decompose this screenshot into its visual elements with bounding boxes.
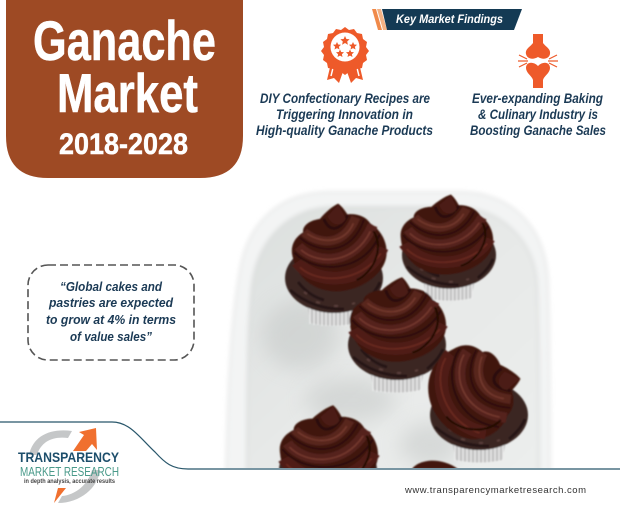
logo: Transparency Market Research: TRANSPARENCY	[18, 449, 120, 465]
cupcake: lower right	[427, 344, 529, 463]
cupcake: bottom edge	[412, 461, 458, 469]
banner: Key Market Findings: Key Market Findings	[396, 12, 503, 26]
text: finding one: DIY Confectionary Recipes are	[260, 91, 430, 106]
banner: Key Market Findings	[372, 9, 522, 30]
callout: quote	[28, 265, 194, 360]
text: finding one: High-quality Ganache Products	[256, 123, 433, 138]
title: Ganache Market: 2018-2028	[59, 128, 188, 161]
cupcake: top left	[285, 199, 391, 326]
photo: cupcakes on white plate	[225, 190, 552, 468]
icon: medal rosette	[321, 27, 369, 83]
title: Ganache Market: Market	[57, 62, 198, 124]
text: finding two	[470, 91, 606, 138]
cupcake: centre	[348, 277, 446, 393]
logo: Transparency Market Research	[18, 428, 120, 503]
panel: title block	[6, 0, 243, 178]
callout: quote: to grow at 4% in terms	[46, 312, 176, 327]
website url: www.transparencymarketresearch.com	[404, 485, 586, 496]
callout: quote: pastries are expected	[48, 295, 174, 310]
footer curve line	[0, 422, 620, 469]
logo: Transparency Market Research: MARKET RESEARCH	[20, 465, 119, 479]
callout: quote: “Global cakes and	[60, 279, 163, 294]
logo: Transparency Market Research: in depth analysis, accurate results	[24, 479, 116, 485]
text: finding one	[256, 91, 433, 138]
callout: quote: of value sales”	[70, 329, 152, 344]
cupcake: bottom left	[278, 404, 380, 468]
title: Ganache Market: Ganache	[33, 9, 216, 72]
icon: knee joint	[518, 34, 558, 88]
cupcake: top right	[401, 195, 496, 301]
title: Ganache Market	[33, 9, 216, 161]
text: finding one: Triggering Innovation in	[276, 107, 413, 122]
text: finding two: Ever-expanding Baking	[472, 91, 604, 106]
text: finding two: & Culinary Industry is	[478, 107, 598, 122]
plate	[226, 192, 550, 480]
